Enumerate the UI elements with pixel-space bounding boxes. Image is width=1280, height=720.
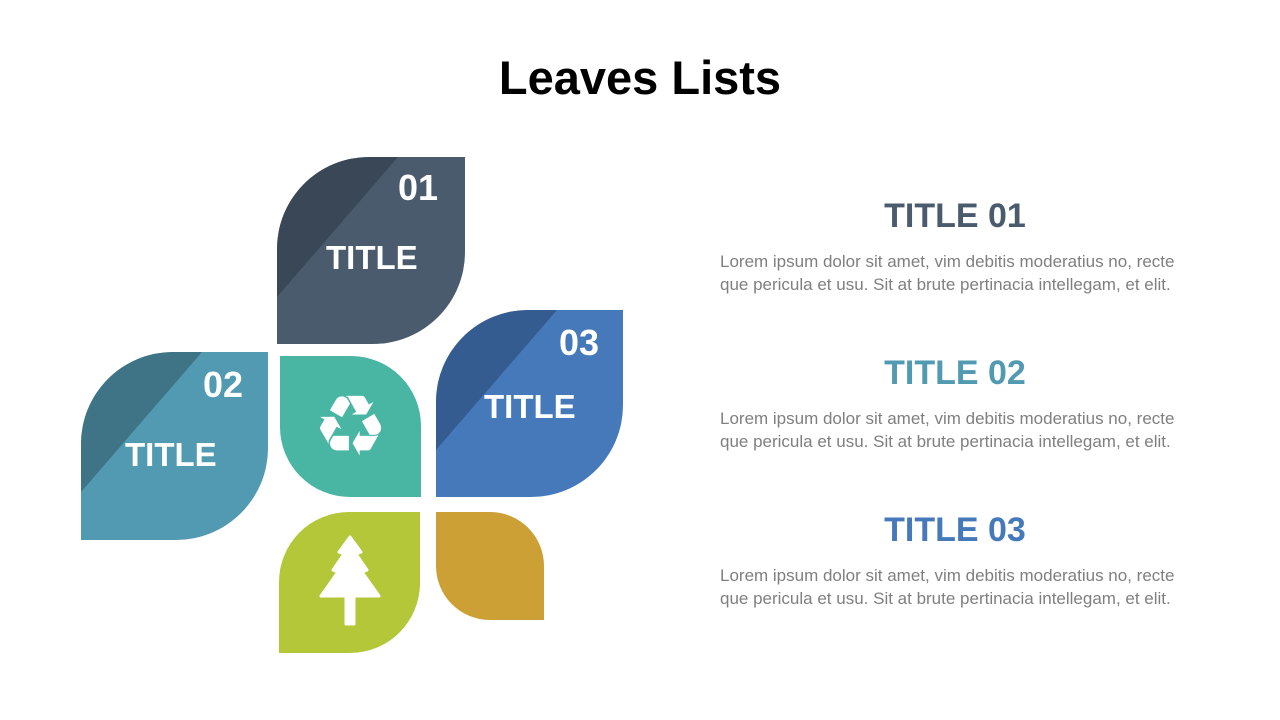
leaf 01: 01 — [398, 167, 438, 208]
icon: tree — [320, 535, 381, 626]
text block 03 — [720, 511, 1174, 608]
text block 02 — [720, 354, 1174, 451]
title: Leaves Lists — [499, 51, 781, 104]
text: Lorem ipsum dolor sit amet, vim debitis moderatius no, recte que pericula et usu. Sit at brute pertinacia intellegam, et elit. — [720, 566, 1174, 608]
icon: recycle: ♻ — [313, 377, 388, 475]
leaf 01 — [277, 157, 465, 344]
leaf 02: TITLE — [125, 436, 217, 473]
text: TITLE 02 — [884, 354, 1026, 392]
leaf 02: 02 — [203, 364, 243, 405]
leaf 02 — [81, 352, 268, 540]
text: Lorem ipsum dolor sit amet, vim debitis moderatius no, recte que pericula et usu. Sit at brute pertinacia intellegam, et elit. — [720, 409, 1174, 451]
leaf lime with tree icon — [279, 512, 420, 653]
leaf 03: 03 — [559, 322, 599, 363]
text: Lorem ipsum dolor sit amet, vim debitis moderatius no, recte que pericula et usu. Sit at brute pertinacia intellegam, et elit. — [720, 252, 1174, 294]
leaf 01: TITLE — [326, 239, 418, 276]
text block 01 — [720, 197, 1174, 294]
leaf 03: TITLE — [484, 388, 576, 425]
leaf 03 — [436, 310, 623, 497]
text: TITLE 03 — [884, 511, 1026, 549]
leaf teal with recycle icon — [280, 356, 421, 497]
text: TITLE 01 — [884, 197, 1026, 235]
leaf orange — [436, 512, 544, 620]
